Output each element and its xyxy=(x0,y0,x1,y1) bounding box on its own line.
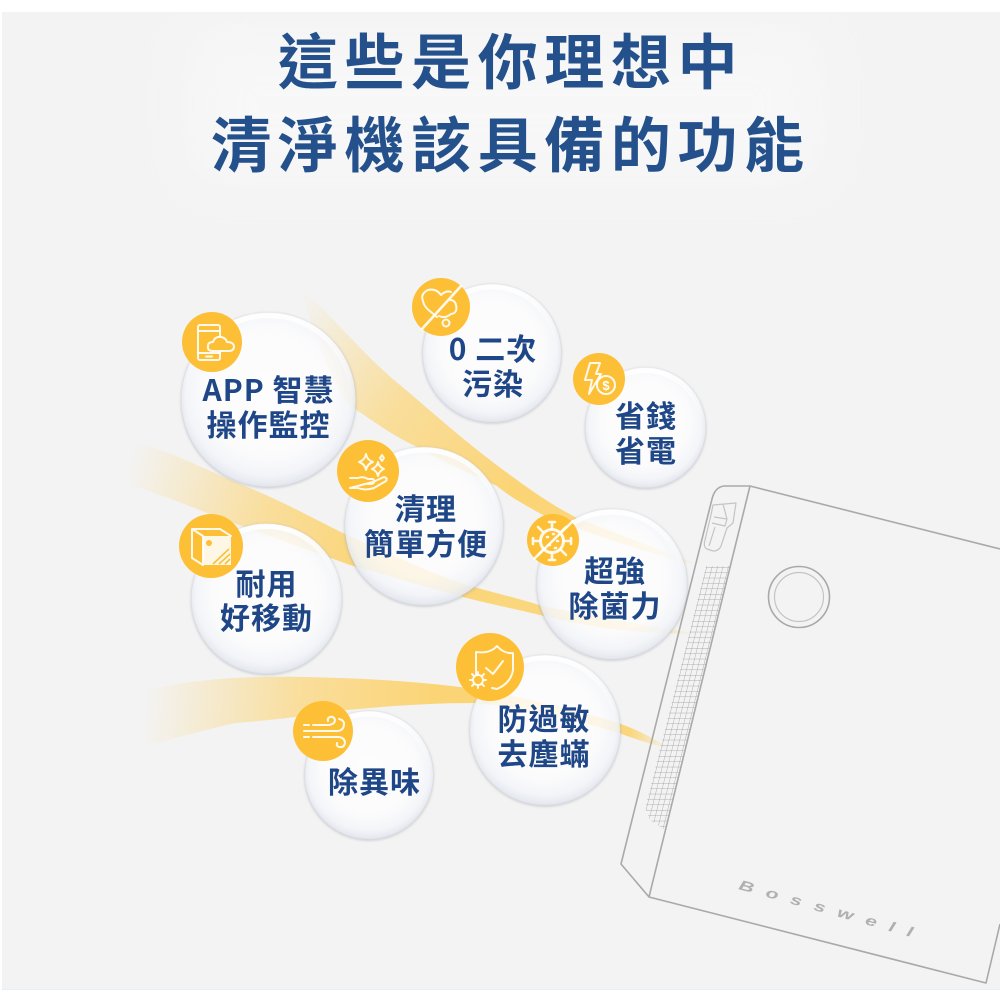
label: 除異味 xyxy=(328,758,421,802)
bubble: strong sterilisation xyxy=(527,509,687,660)
title: 這些是你理想中 xyxy=(278,15,744,102)
icon: wind xyxy=(293,701,353,761)
title: 清淨機該具備的功能 xyxy=(211,98,811,185)
purifier body xyxy=(621,486,1000,983)
air stream: upper beam xyxy=(300,288,702,566)
icon: box panel xyxy=(179,514,243,578)
label: 污染 xyxy=(462,360,524,404)
label: 去塵蟎 xyxy=(498,730,590,774)
bubble: no secondary pollution xyxy=(412,278,561,422)
icon: crossed virus xyxy=(527,514,579,566)
icon: hand with sparkles xyxy=(337,440,399,502)
label: 除菌力 xyxy=(568,582,662,626)
icon: crossed cloud xyxy=(412,278,470,336)
bubble: durable and movable xyxy=(179,514,342,674)
label: APP 智慧 xyxy=(201,366,335,410)
bubble: APP control xyxy=(182,312,356,487)
purifier vent grille xyxy=(645,566,731,830)
bubble: remove odours xyxy=(293,701,433,840)
purifier power dial xyxy=(768,566,830,628)
bottom edge line xyxy=(2,989,1000,990)
label: 耐用 xyxy=(236,560,298,604)
icon: bolt and coin: $ xyxy=(602,378,610,393)
label xyxy=(220,560,313,638)
purifier handle xyxy=(704,503,736,551)
title glow xyxy=(190,30,820,180)
label xyxy=(449,325,537,404)
label: 簡單方便 xyxy=(364,520,488,564)
label xyxy=(568,547,662,626)
bubble: easy to clean xyxy=(337,440,503,606)
label xyxy=(364,485,488,564)
icon: phone and cloud xyxy=(182,312,242,372)
icon: shield with check xyxy=(456,633,524,701)
label xyxy=(615,392,677,471)
label: 0 二次 xyxy=(449,325,537,369)
label: 防過敏 xyxy=(498,695,590,739)
label: 省錢 xyxy=(615,392,677,436)
bubble: anti-allergy and dust mites xyxy=(456,633,620,806)
bubble: save money and power xyxy=(573,353,706,488)
label: 超強 xyxy=(584,547,646,591)
label xyxy=(201,366,335,445)
title xyxy=(211,15,811,185)
air purifier outline xyxy=(621,486,1000,983)
air stream: lower beam xyxy=(146,677,670,749)
label: 操作監控 xyxy=(206,401,330,445)
label xyxy=(498,695,590,774)
label: 清理 xyxy=(395,485,457,529)
Bosswell logo: Bosswell xyxy=(737,877,916,940)
label: 省電 xyxy=(615,427,677,471)
label: 好移動 xyxy=(220,594,313,638)
air stream: middle beam xyxy=(130,441,700,634)
